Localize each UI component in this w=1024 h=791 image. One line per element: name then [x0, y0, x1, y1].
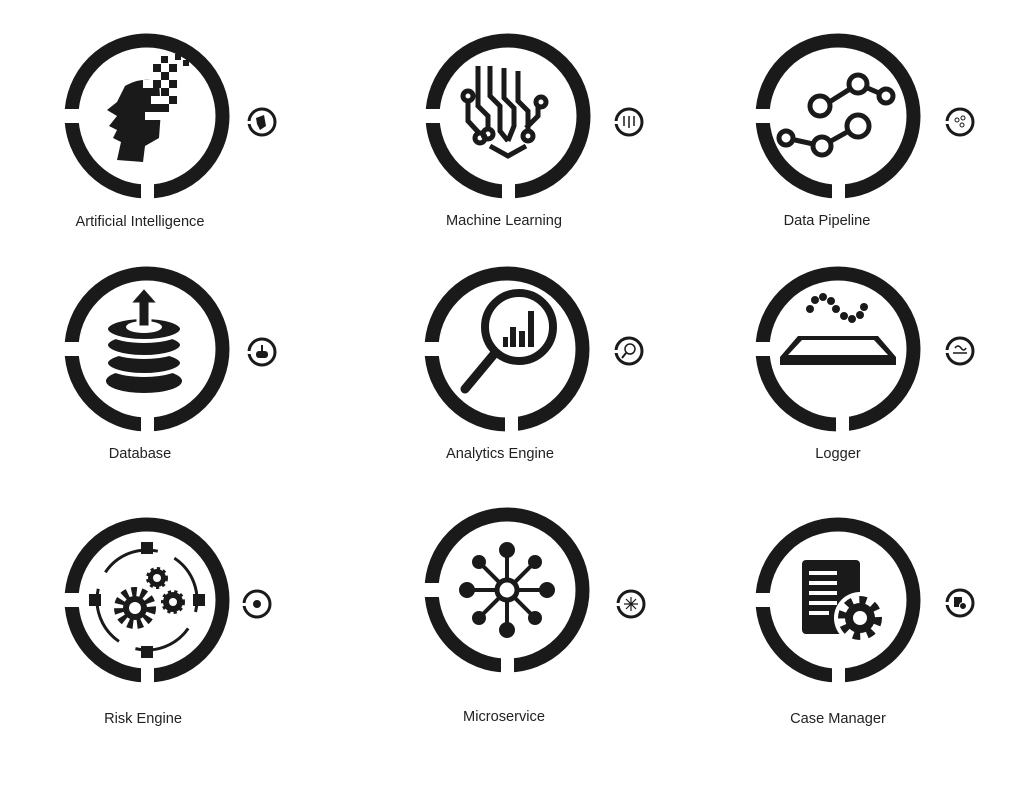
panel: Analytics Engine [417, 274, 582, 439]
small icon: AE [613, 338, 642, 364]
panel: Artificial Intelligence [57, 40, 222, 206]
icon: hub with spokes [461, 544, 553, 636]
icon: chevron base [490, 146, 526, 156]
ring [748, 524, 914, 690]
small icon: Case [944, 590, 973, 616]
icon: gears in dashed circle [77, 530, 217, 670]
icon: document with gear [802, 560, 886, 644]
panel: Microservice [417, 514, 582, 680]
label: Data Pipeline: Data Pipeline [784, 213, 870, 229]
panel: Logger [748, 274, 914, 439]
icon: database stack with arrow [106, 287, 182, 393]
label: Logger: Logger [815, 446, 861, 462]
ring [748, 274, 914, 439]
label: Risk Engine: Risk Engine [104, 711, 182, 727]
small icon: DB [246, 339, 275, 365]
label: Analytics Engine: Analytics Engine [446, 446, 554, 462]
ring [417, 514, 582, 680]
panel: Risk Engine [57, 524, 222, 690]
ring [417, 274, 582, 439]
panel: Database [57, 274, 222, 439]
ring [57, 274, 222, 439]
small icon: DP [944, 109, 973, 135]
label: Artificial Intelligence: Artificial Intelligence [76, 214, 204, 230]
small icon: Risk [241, 591, 270, 617]
panel: Machine Learning [418, 40, 584, 206]
icon: circuit [463, 66, 546, 143]
small icon: AI [246, 109, 275, 135]
label: Database: Database [109, 446, 171, 462]
icon: head with pixels [107, 46, 192, 162]
icon: connected nodes [779, 75, 893, 155]
label: Case Manager: Case Manager [790, 711, 886, 727]
small icon: Micro [615, 591, 644, 617]
small icon: ML [613, 109, 642, 135]
ring [418, 40, 584, 206]
label: Machine Learning: Machine Learning [446, 213, 562, 229]
label: Microservice: Microservice [463, 709, 545, 725]
panel: Data Pipeline [748, 40, 914, 206]
ring [57, 40, 222, 206]
ring [748, 40, 914, 206]
panel: Case Manager [748, 524, 914, 690]
small icon: Logger [944, 338, 973, 364]
icon: magnifier with bars [465, 293, 553, 389]
ring [57, 524, 222, 690]
icon: tablet with wave dots [780, 293, 896, 365]
